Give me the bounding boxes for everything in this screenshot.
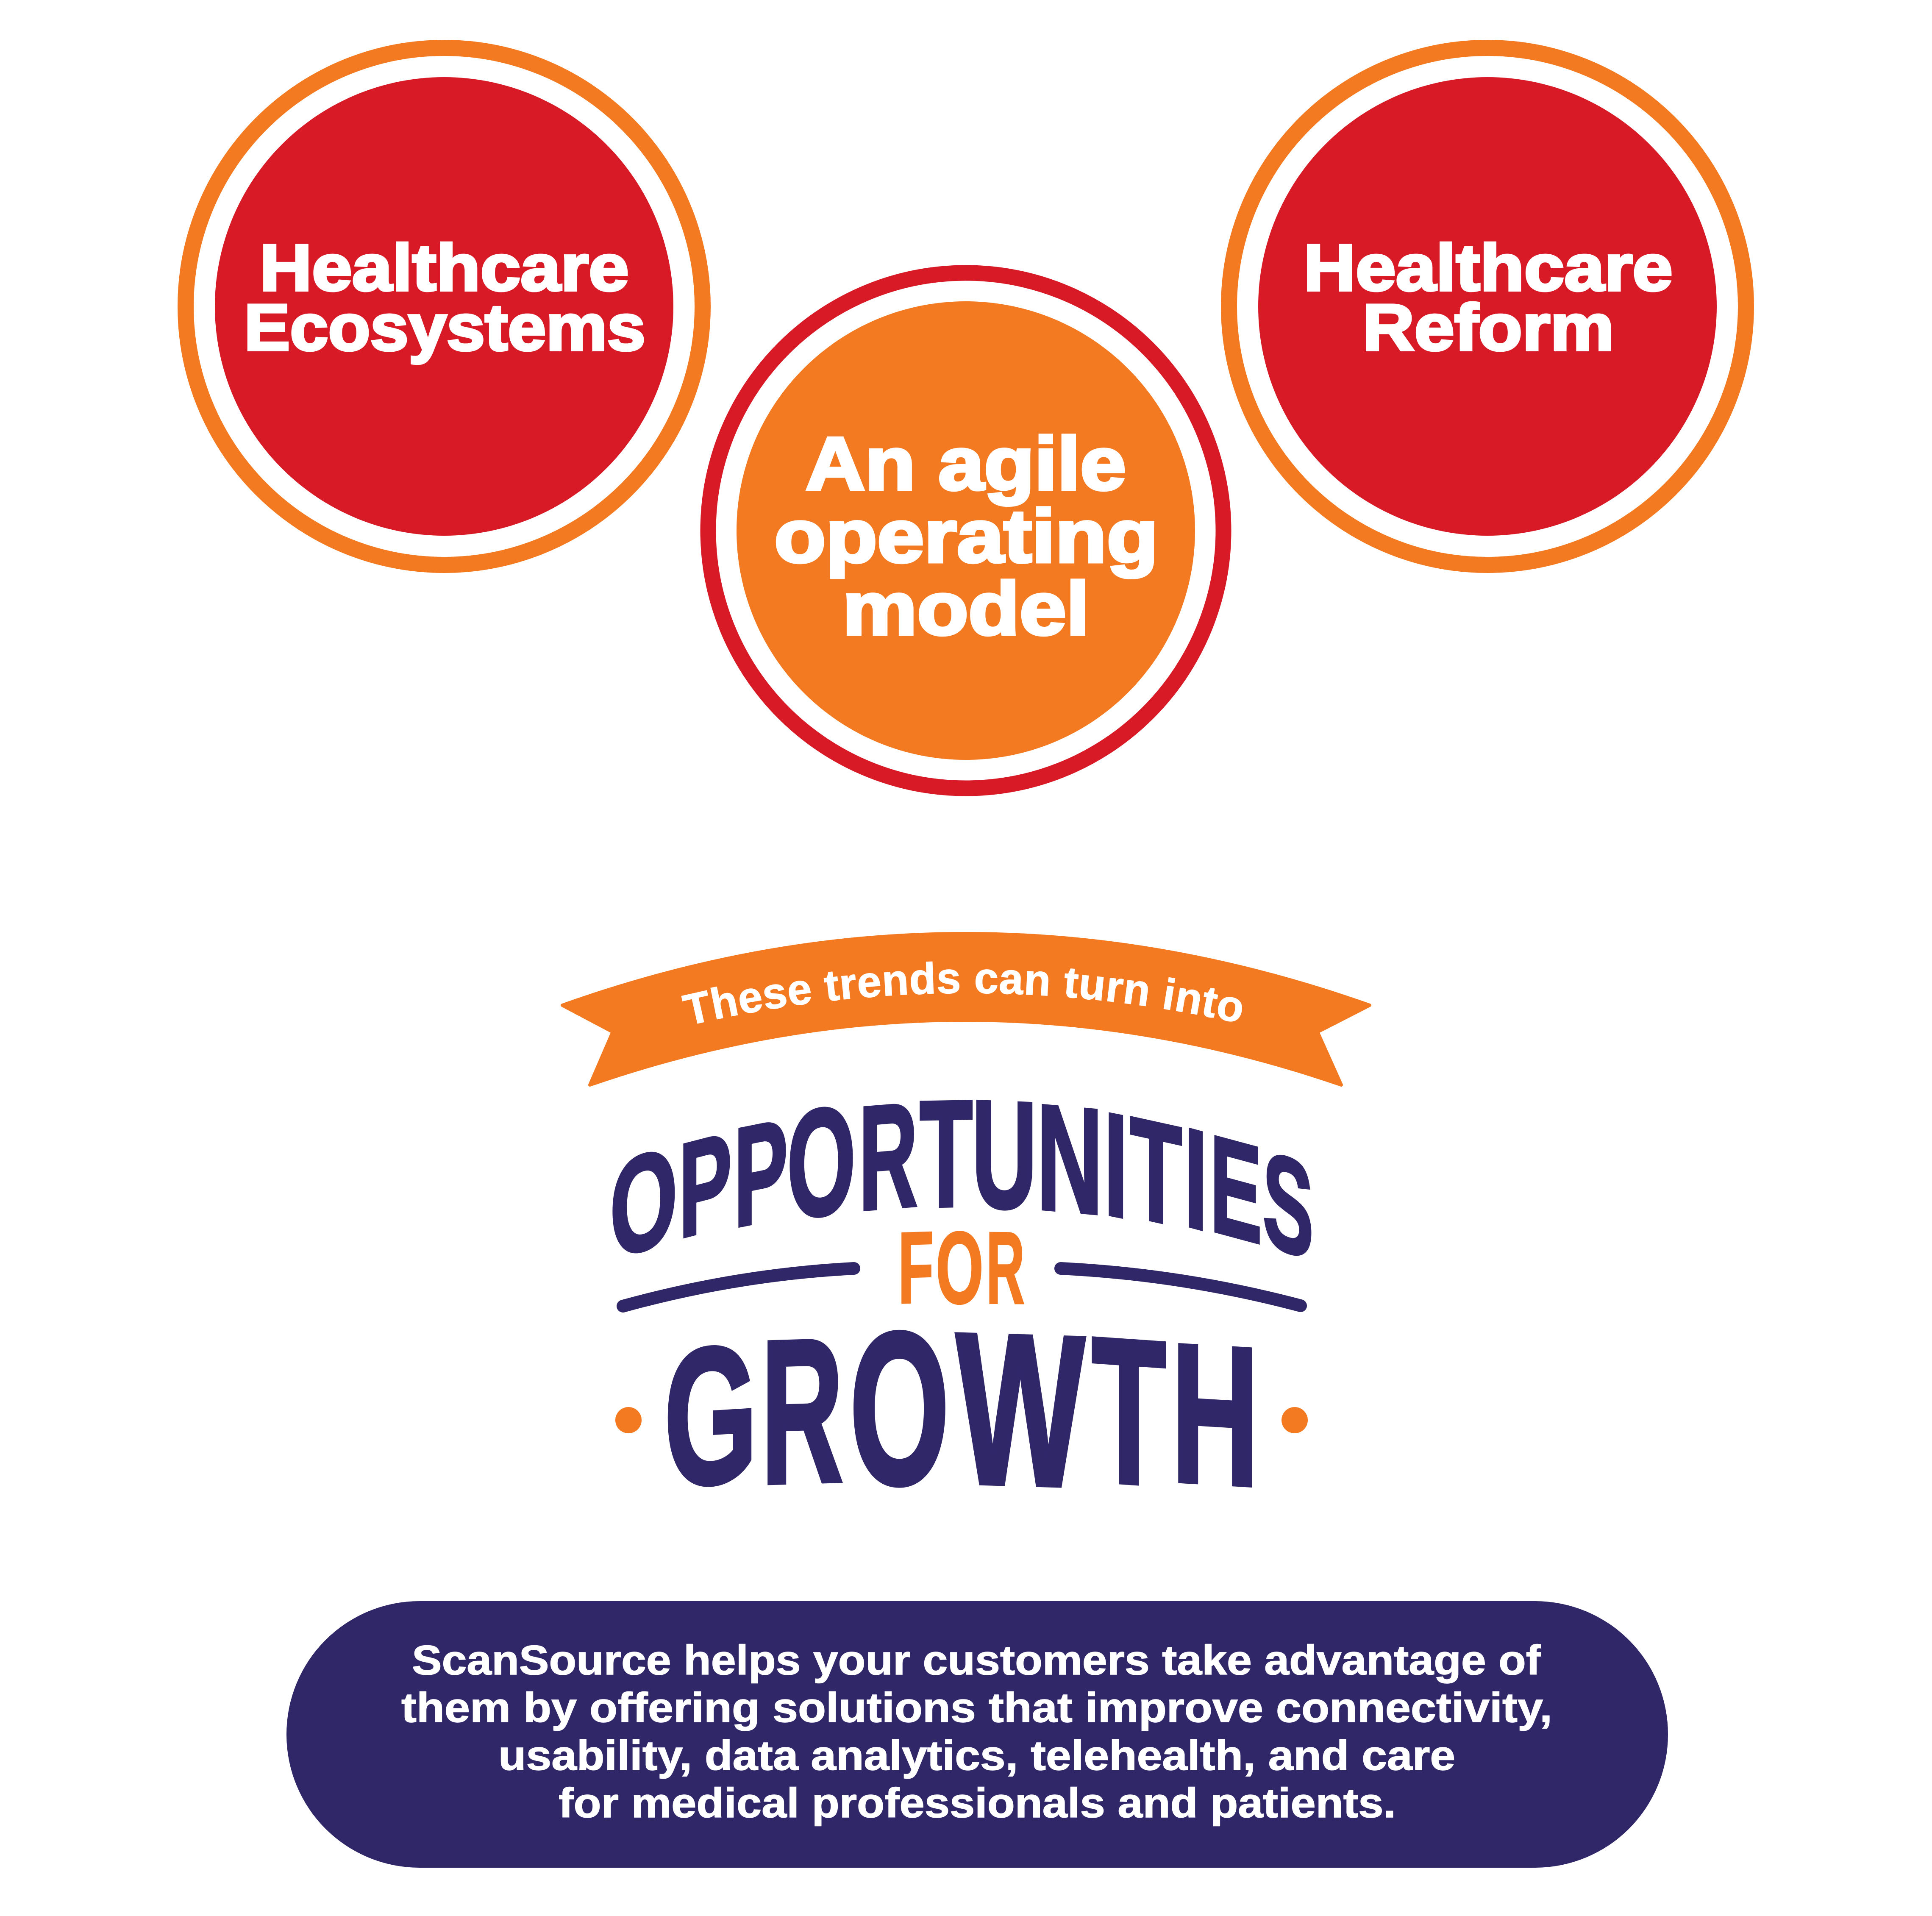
headline: GROWTH: O — [850, 1288, 949, 1530]
headline: OPPORTUNITIES: E — [1210, 1106, 1262, 1274]
headline: OPPORTUNITIES: O — [610, 1116, 678, 1288]
callout text: ScanSource helps your customers take advantage of — [412, 1637, 1541, 1683]
panel: An agile operating model circle — [708, 273, 1223, 788]
dot right — [1282, 1407, 1308, 1433]
headline: FOR: F — [898, 1211, 934, 1325]
panel: Healthcare Ecosystems circle — [186, 48, 703, 565]
headline: GROWTH — [664, 1288, 1259, 1532]
ribbon banner — [562, 934, 1370, 1085]
headline: OPPORTUNITIES: U — [972, 1068, 1037, 1241]
label: Healthcare Ecosystems: Healthcare — [260, 231, 629, 304]
headline: FOR: R — [986, 1210, 1025, 1325]
label: An agile operating model: operating — [774, 494, 1158, 578]
headline: OPPORTUNITIES: S — [1263, 1121, 1314, 1289]
label: Healthcare Ecosystems: Ecosystems — [244, 291, 645, 364]
callout text: usability, data analytics, telehealth, and care — [498, 1732, 1455, 1779]
label: An agile operating model: An agile — [806, 422, 1126, 506]
curved rule right — [1061, 1268, 1301, 1306]
callout text — [401, 1637, 1552, 1826]
headline: GROWTH: T — [1092, 1294, 1166, 1529]
headline: GROWTH: H — [1171, 1302, 1259, 1528]
label: An agile operating model: model — [842, 567, 1090, 651]
headline: GROWTH: G — [664, 1304, 758, 1527]
label: Healthcare Reform: Reform — [1362, 291, 1614, 364]
label: Healthcare Ecosystems — [244, 231, 645, 364]
headline: OPPORTUNITIES: T — [1130, 1087, 1182, 1257]
headline: OPPORTUNITIES: N — [1037, 1073, 1103, 1246]
panel: ScanSource callout pill — [286, 1601, 1668, 1868]
headline: OPPORTUNITIES: T — [920, 1068, 973, 1239]
label: Healthcare Reform: Healthcare — [1304, 231, 1673, 304]
dot left — [615, 1407, 642, 1433]
headline: OPPORTUNITIES: O — [787, 1073, 856, 1251]
curved rule left — [623, 1268, 854, 1306]
headline: OPPORTUNITIES — [610, 1068, 1314, 1289]
banner text: These trends can turn into — [679, 954, 1249, 1034]
headline: GROWTH: W — [956, 1288, 1086, 1532]
headline: OPPORTUNITIES: P — [734, 1089, 788, 1257]
headline: FOR — [898, 1210, 1025, 1325]
headline: OPPORTUNITIES: I — [1104, 1081, 1128, 1250]
headline: OPPORTUNITIES: P — [679, 1103, 732, 1267]
headline: GROWTH: R — [761, 1296, 843, 1527]
callout text: for medical professionals and patients. — [559, 1780, 1396, 1826]
panel: Healthcare Reform circle — [1229, 48, 1746, 565]
label: An agile operating model — [774, 422, 1158, 651]
headline: OPPORTUNITIES: I — [1184, 1097, 1208, 1261]
headline: FOR: O — [936, 1211, 984, 1325]
headline: OPPORTUNITIES: R — [859, 1071, 917, 1242]
callout text: them by offering solutions that improve connectivity, — [401, 1684, 1552, 1731]
label: Healthcare Reform — [1304, 231, 1673, 364]
